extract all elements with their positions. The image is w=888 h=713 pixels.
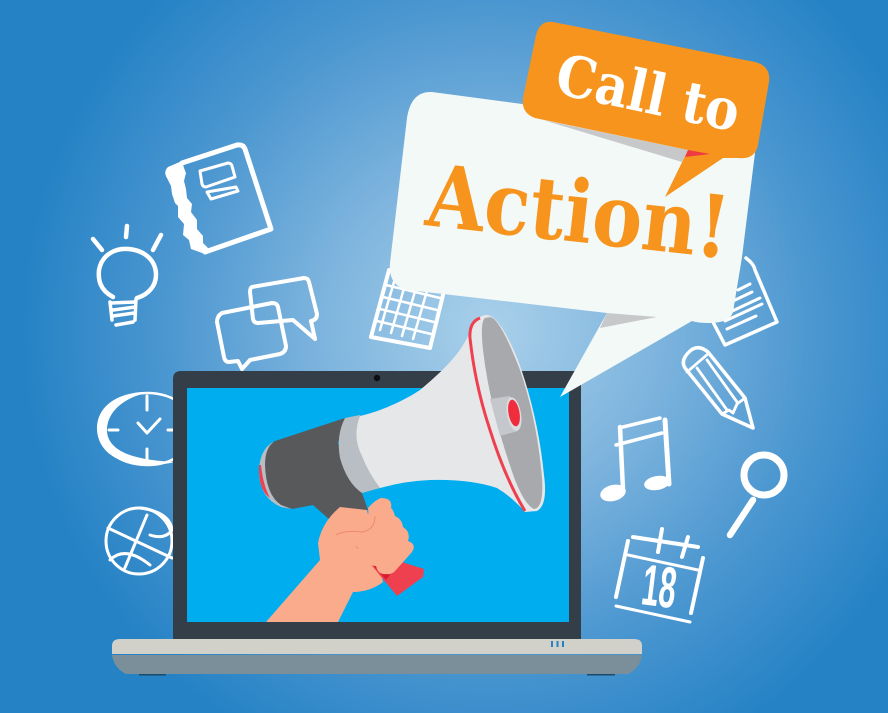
indicator lights xyxy=(552,641,563,647)
calendar date: 18 xyxy=(638,552,680,621)
hand palm and arm xyxy=(266,507,383,622)
icon: calendar xyxy=(616,529,703,622)
hand fingers xyxy=(345,498,414,574)
heading: Action!: Action! xyxy=(421,145,735,279)
laptop base bottom xyxy=(112,655,642,674)
orange bubble shadow xyxy=(543,120,688,162)
icon: globe ball xyxy=(106,508,172,574)
icon: clock xyxy=(97,392,195,465)
megaphone rear cap xyxy=(259,442,292,509)
laptop bezel xyxy=(173,371,581,640)
heading: Call to: Call to xyxy=(550,41,746,145)
megaphone bell xyxy=(356,315,545,512)
camera xyxy=(374,375,380,381)
tail fold xyxy=(685,150,710,157)
speaker red cap xyxy=(504,396,524,432)
megaphone xyxy=(259,315,545,622)
bubble tail shadow xyxy=(600,313,657,328)
icon: pencil xyxy=(683,348,753,428)
icon: keyboard calendar xyxy=(371,270,443,348)
icon: notebook xyxy=(165,145,271,254)
finger crease xyxy=(336,516,375,535)
icon: music notes xyxy=(598,418,671,504)
megaphone collar xyxy=(339,415,380,493)
laptop base top xyxy=(112,639,642,654)
laptop screen xyxy=(187,388,569,622)
icon: light bulb xyxy=(93,226,161,325)
icon: magnifying glass xyxy=(730,455,784,535)
feet xyxy=(139,674,615,676)
laptop xyxy=(112,371,642,676)
speaker stem xyxy=(490,396,518,436)
megaphone handle xyxy=(345,533,424,596)
icon: speech bubbles xyxy=(217,278,317,369)
bell red stripe xyxy=(470,318,525,511)
bell inner cone xyxy=(482,317,542,509)
megaphone grip body xyxy=(265,418,368,520)
speech bubble: Action xyxy=(390,92,755,397)
icon: document xyxy=(713,258,777,345)
speech bubble: Call to xyxy=(523,22,769,197)
